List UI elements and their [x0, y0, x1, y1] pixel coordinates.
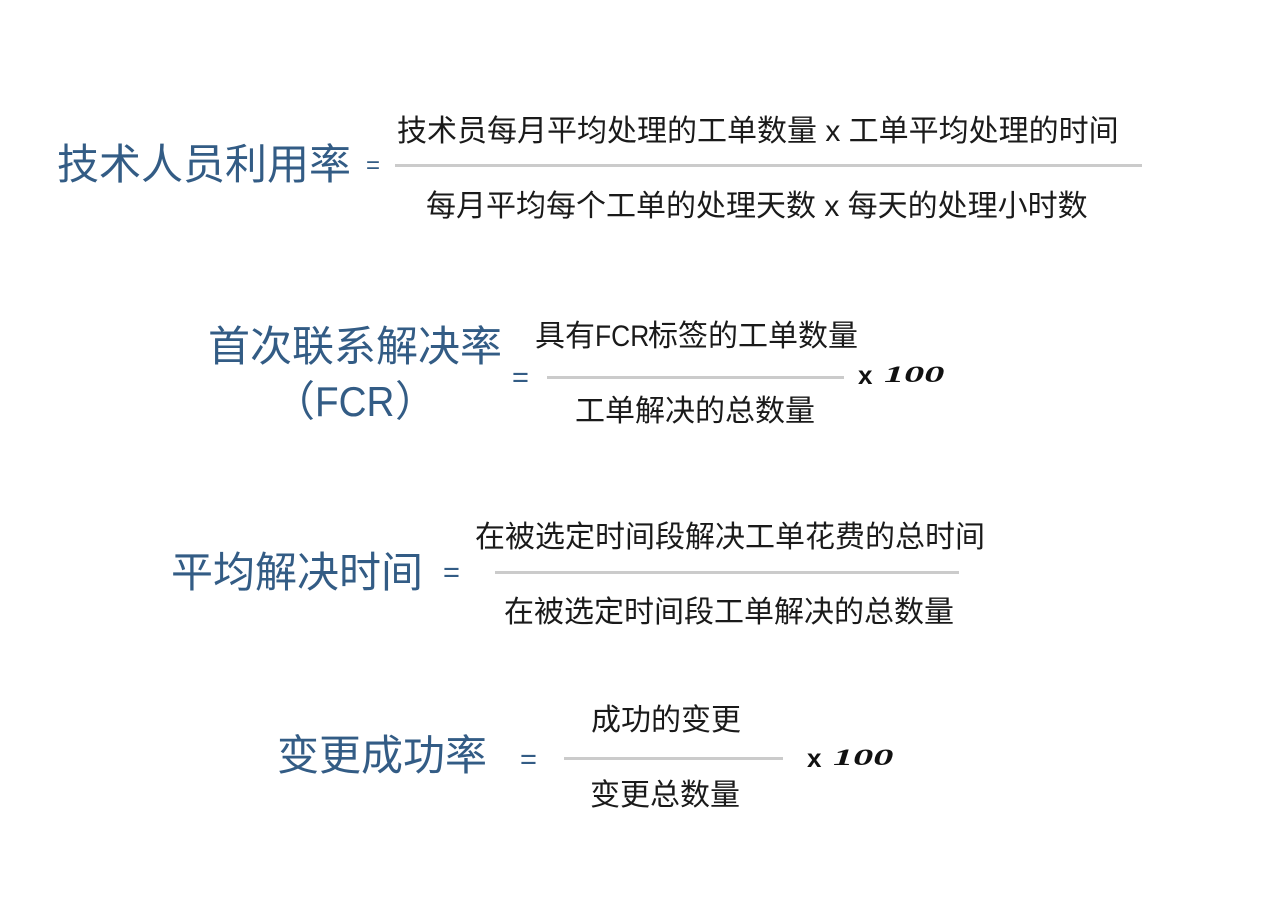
formula: technician utilization: [57, 115, 1142, 223]
equals sign: =: [366, 152, 380, 179]
fraction bar: [547, 376, 844, 379]
multiplier x 100: x: [807, 743, 821, 773]
multiplier x 100: 100: [884, 362, 944, 387]
numerator: 具有 标签的工单数量: [535, 320, 858, 353]
multiplier x 100: [858, 360, 944, 390]
denominator: 在被选定时间段工单解决的总数量: [504, 596, 954, 629]
numerator: 技术员每月平均处理的工单数量 x 工单平均处理的时间: [397, 115, 1119, 148]
heading: FCR abbreviation: FCR: [315, 378, 394, 425]
equals sign: =: [512, 362, 529, 394]
multiplier x 100: 100: [833, 745, 893, 770]
formula: first contact resolution: [208, 320, 944, 428]
denominator: 每月平均每个工单的处理天数 x 每天的处理小时数: [426, 190, 1088, 223]
multiplier x 100: x: [858, 360, 872, 390]
heading: technician utilization: 技术人员利用率: [57, 141, 351, 188]
heading: first contact resolution: 首次联系解决率: [208, 323, 502, 370]
numerator: 在被选定时间段解决工单花费的总时间: [475, 521, 985, 554]
heading: FCR abbreviation: （ ）: [273, 378, 437, 425]
denominator: 工单解决的总数量: [575, 395, 815, 428]
fraction bar: [564, 757, 783, 760]
heading: mean resolution time: 平均解决时间: [171, 549, 423, 596]
denominator: 变更总数量: [590, 779, 740, 812]
fraction bar: [495, 571, 959, 574]
numerator: 成功的变更: [591, 704, 741, 737]
heading: change success rate: 变更成功率: [277, 732, 487, 779]
equals sign: =: [520, 744, 537, 776]
numerator: FCR: [595, 320, 649, 353]
multiplier x 100: [807, 743, 893, 773]
formula: mean time to resolve: [171, 521, 985, 629]
fraction bar: [395, 164, 1142, 167]
equals sign: =: [443, 557, 460, 589]
formula: change success rate: [277, 704, 893, 812]
